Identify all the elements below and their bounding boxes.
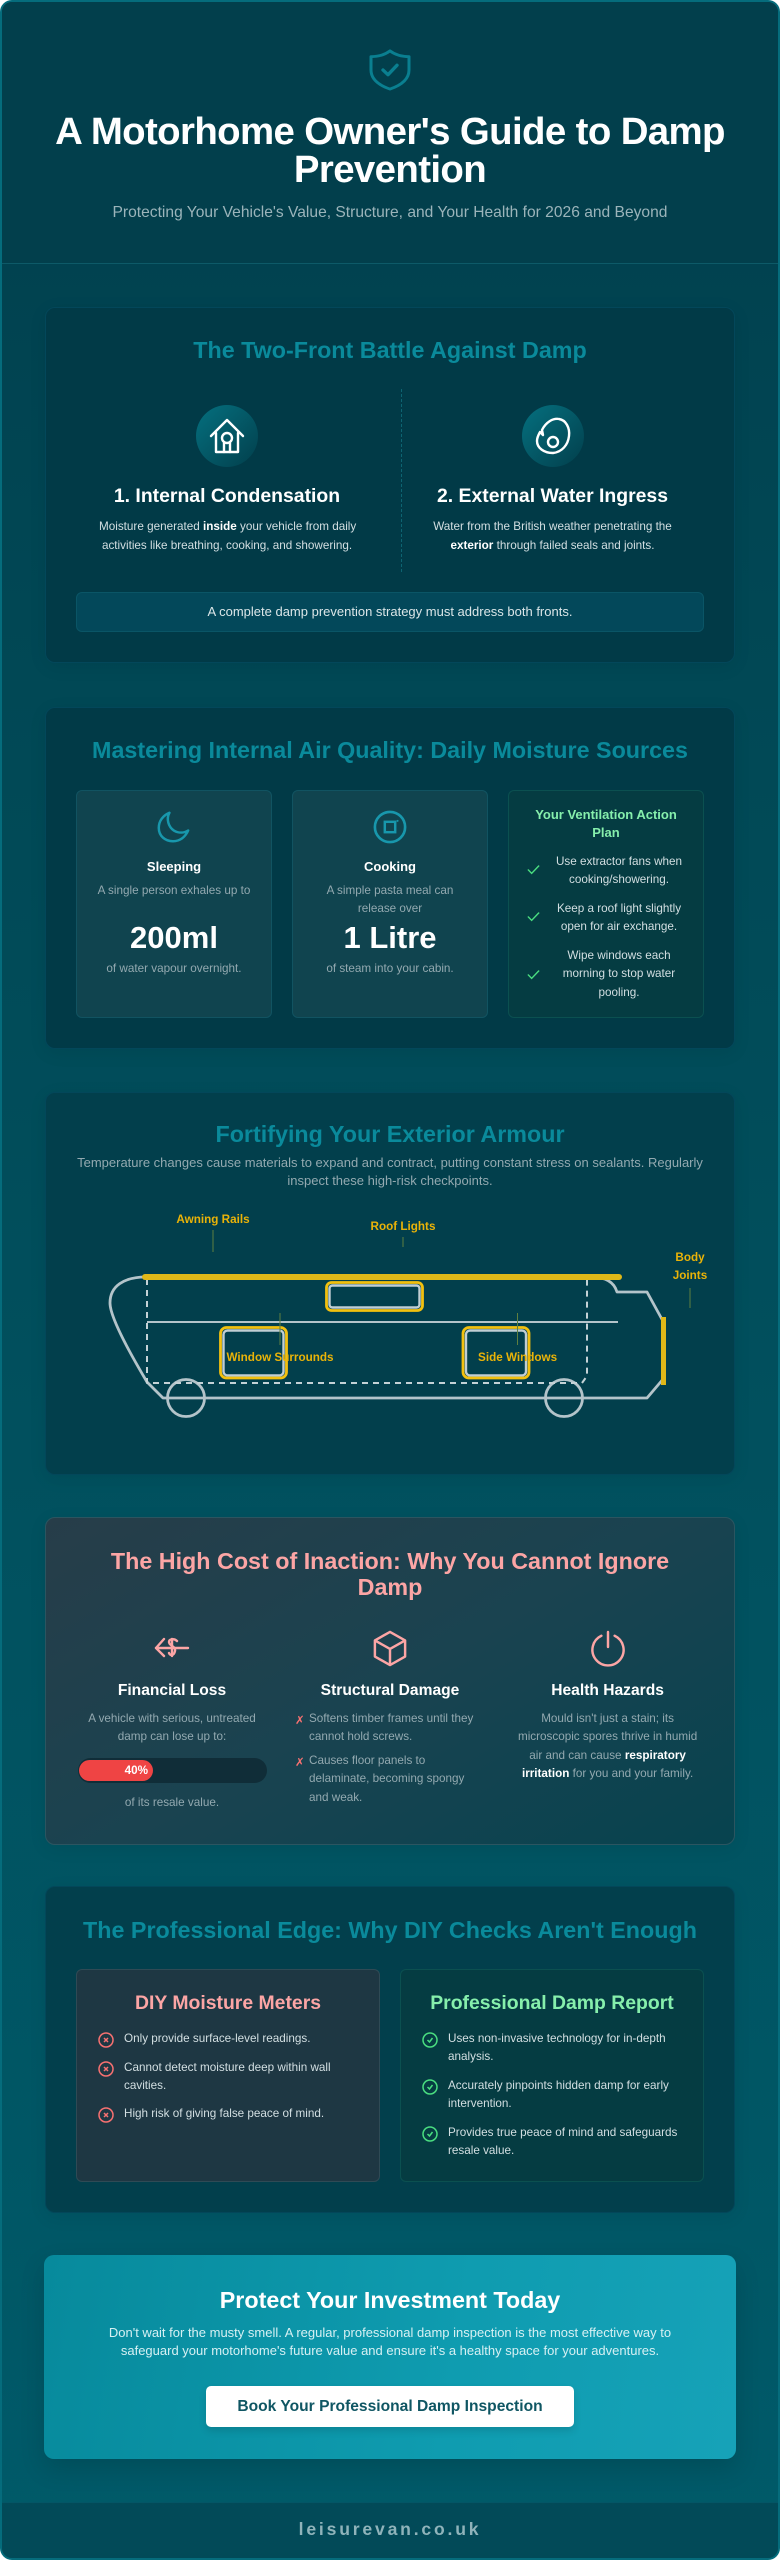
bullet list: delaminate, becoming spongy [309,1772,464,1785]
action item: pooling. [599,986,639,999]
list item: Only provide surface-level readings. [124,2032,310,2045]
bullet list: cannot hold screws. [309,1730,412,1743]
action item: Use extractor fans when [556,855,682,868]
progress bar 40%: 40% [125,1764,148,1777]
action item [527,855,682,886]
list item: Uses non-invasive technology for in-depth [448,2032,666,2045]
stat: 200ml: 200ml [130,920,218,955]
list item [422,2032,666,2063]
bullet list: Softens timber frames until they [309,1712,473,1725]
seal highlights [145,1277,664,1385]
column text [518,1712,697,1780]
heading: The High Cost of Inaction: Why You Cannot Ignore [111,1548,669,1574]
card title [535,807,677,840]
column text [99,520,356,552]
title: Prevention [294,148,486,191]
list item: analysis. [448,2050,493,2063]
icon: cube [374,1630,406,1666]
van body outline [110,1277,664,1416]
list item: High risk of giving false peace of mind. [124,2107,324,2120]
column text: irritation for you and your family. [522,1767,693,1780]
panel: cost of inaction [45,1517,735,1845]
call to action [44,2255,736,2459]
CTA text: Don't wait for the musty smell. A regular, professional damp inspection is the most effective way to [109,2325,671,2340]
column text: exterior through failed seals and joints. [450,539,655,552]
panel: two-front battle [45,307,735,663]
column: structural damage [295,1630,474,1804]
column title: Health Hazards [551,1682,664,1699]
icon: shield with check [370,50,410,90]
heading: Damp [358,1574,422,1600]
list item [422,2126,677,2157]
heading: Fortifying Your Exterior Armour [215,1121,565,1147]
action item: open for air exchange. [561,920,677,933]
card: sleeping [76,790,272,1018]
title [55,110,725,191]
action item [527,902,681,933]
label: roof lights: Roof Lights [371,1220,435,1233]
icon: moon [158,812,190,842]
description [77,1155,703,1188]
column text: air and can cause respiratory [529,1749,686,1762]
label leader lines [213,1230,690,1345]
column text: activities like breathing, cooking, and showering. [102,539,352,552]
action item [527,949,675,999]
column: health hazards [518,1630,697,1780]
card title: Cooking [364,859,416,874]
footer [2,2502,778,2560]
panel: internal air quality [45,707,735,1049]
column text: A vehicle with serious, untreated [88,1712,256,1725]
heading: Mastering Internal Air Quality: Daily Moisture Sources [92,737,688,763]
column text: microscopic spores thrive in humid [518,1730,697,1743]
list item [98,2061,331,2092]
card text: A single person exhales up to [98,884,250,897]
icon: money arrow [154,1638,190,1658]
dashed divider [401,389,402,572]
card title: Your Ventilation Action [535,807,677,822]
list item: cavities. [124,2079,166,2092]
card title: Professional Damp Report [430,1992,674,2014]
action item: Wipe windows each [567,949,671,962]
heading: The Professional Edge: Why DIY Checks Aren't Enough [83,1917,697,1943]
summary callout [76,592,704,632]
card text [326,884,453,915]
label: side windows: Side Windows [478,1351,557,1364]
stat: 1 litre: 1 Litre [343,920,437,955]
card: DIY meters [76,1969,380,2182]
card: cooking [292,790,488,1018]
list item: Accurately pinpoints hidden damp for early [448,2079,669,2092]
list item: intervention. [448,2097,512,2110]
bullet list: ✗ [295,1714,305,1727]
card: professional report [400,1969,704,2182]
column text: damp can lose up to: [118,1730,226,1743]
list item [422,2079,669,2110]
column text: Moisture generated inside your vehicle from daily [99,520,356,533]
column title: Financial Loss [118,1682,226,1699]
heading: The Two-Front Battle Against Damp [193,337,587,363]
title: A Motorhome Owner's Guide to Damp [55,110,725,153]
column: financial loss [78,1638,267,1809]
column text: Mould isn't just a stain; its [541,1712,674,1725]
label: awning rails: Awning Rails [176,1213,250,1226]
card text: of steam into your cabin. [326,962,454,975]
label: body joints: Body [675,1251,705,1264]
progress bar 40% [78,1758,266,1783]
bullet list: ✗ [295,1756,305,1769]
icon: flame drop [522,405,584,467]
card: ventilation plan [508,790,704,1018]
CTA text: safeguard your motorhome's future value and ensure it's a healthy space for your adventures. [121,2343,659,2358]
description: Temperature changes cause materials to expand and contract, putting constant stress on sealants. Regularly [77,1155,703,1170]
card title: DIY Moisture Meters [135,1992,321,2014]
column text: Water from the British weather penetrating the [433,520,672,533]
panel: professional edge [45,1886,735,2213]
column text [88,1712,256,1743]
header [2,2,778,264]
CTA text [109,2325,671,2358]
column title: Structural Damage [321,1682,459,1699]
icon: house [196,405,258,467]
icon: stove [374,810,406,844]
CTA heading: Protect Your Investment Today [220,2287,560,2313]
column title: 1. Internal Condensation [114,485,340,507]
column text [433,520,672,552]
column text: of its resale value. [125,1796,219,1809]
bullet list: Causes floor panels to [309,1754,425,1767]
subtitle: Protecting Your Vehicle's Value, Structure, and Your Health for 2026 and Beyond [113,204,667,221]
panel: exterior armour [45,1092,735,1475]
card text: release over [358,902,422,915]
bullet list: and weak. [309,1791,362,1804]
action item: Keep a roof light slightly [557,902,681,915]
icon: power [591,1630,625,1667]
description: inspect these high-risk checkpoints. [287,1173,493,1188]
summary callout: A complete damp prevention strategy must address both fronts. [208,604,572,619]
CTA button: Book Your Professional Damp Inspection [237,2398,543,2415]
list item: resale value. [448,2144,514,2157]
action item: cooking/showering. [569,873,669,886]
column title: 2. External Water Ingress [437,485,668,507]
bullet list [295,1712,474,1804]
card title: Sleeping [147,859,201,874]
card title: Plan [592,825,620,840]
label: body joints [673,1251,707,1282]
action item: morning to stop water [563,967,675,980]
CTA button [206,2386,574,2427]
card text: A simple pasta meal can [327,884,453,897]
website: leisurevan.co.uk [299,2519,481,2539]
list item: Provides true peace of mind and safeguards [448,2126,677,2139]
list item: Cannot detect moisture deep within wall [124,2061,331,2074]
label: body joints: Joints [673,1269,707,1282]
heading [111,1548,669,1600]
card text: of water vapour overnight. [106,962,242,975]
label: window surrounds: Window Surrounds [226,1351,334,1364]
